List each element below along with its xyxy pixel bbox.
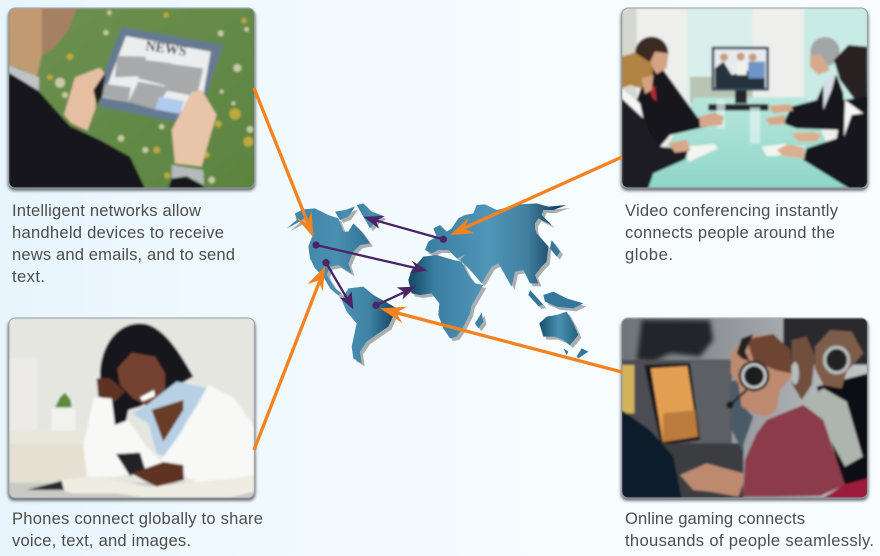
panel: photo of video conference meeting [621,8,868,191]
text: video conference caption: Video conferencing instantly [625,201,839,220]
text: tablet caption [12,201,235,286]
text: phone caption: voice, text, and images. [12,531,191,550]
panel: photo of woman using phone [8,318,255,501]
continent: Madagascar [475,313,483,328]
text: phone caption: Phones connect globally to share [12,509,263,528]
text: video conference caption: connects people around the [625,223,835,242]
continent: Australia [539,312,578,345]
continent: North America [287,203,383,295]
orange arrow: video conference photo to map [450,157,622,235]
map shadow [290,206,586,366]
text: tablet caption: text. [12,267,45,286]
text: video conference caption: globe. [625,245,673,264]
text: phone caption [12,509,263,550]
panel: photo of man reading news on tablet: NEWS [144,39,188,60]
world map with connection arrows [254,88,622,450]
purple arrow: South America to Africa [372,287,416,309]
text: tablet caption: news and emails, and to send [12,245,235,264]
purple arrow: North America to Africa [312,241,428,273]
text: gaming caption: Online gaming connects [625,509,805,528]
continent: Southeast Asia islands [528,240,583,308]
purple arrow: North America to South America [322,259,353,309]
text: video conference caption [625,201,839,264]
text: tablet caption: handheld devices to receive [12,223,224,242]
orange arrow: gaming photo to map [380,307,622,372]
text: tablet caption: Intelligent networks allow [12,201,202,220]
orange arrow: tablet photo to map [254,88,313,237]
continent: Eurasia [425,203,567,287]
continent: New Zealand [563,348,588,358]
panel: photo of online gamers with headsets [621,318,868,501]
continent: South America [342,287,397,363]
text: gaming caption: thousands of people seamlessly. [625,531,874,550]
purple arrow: Europe to North America [363,216,447,243]
continent: Africa [408,255,483,338]
text: gaming caption [625,509,874,550]
orange arrow: phone photo to map [254,266,325,450]
panel: photo of man reading news on tablet [8,8,255,191]
